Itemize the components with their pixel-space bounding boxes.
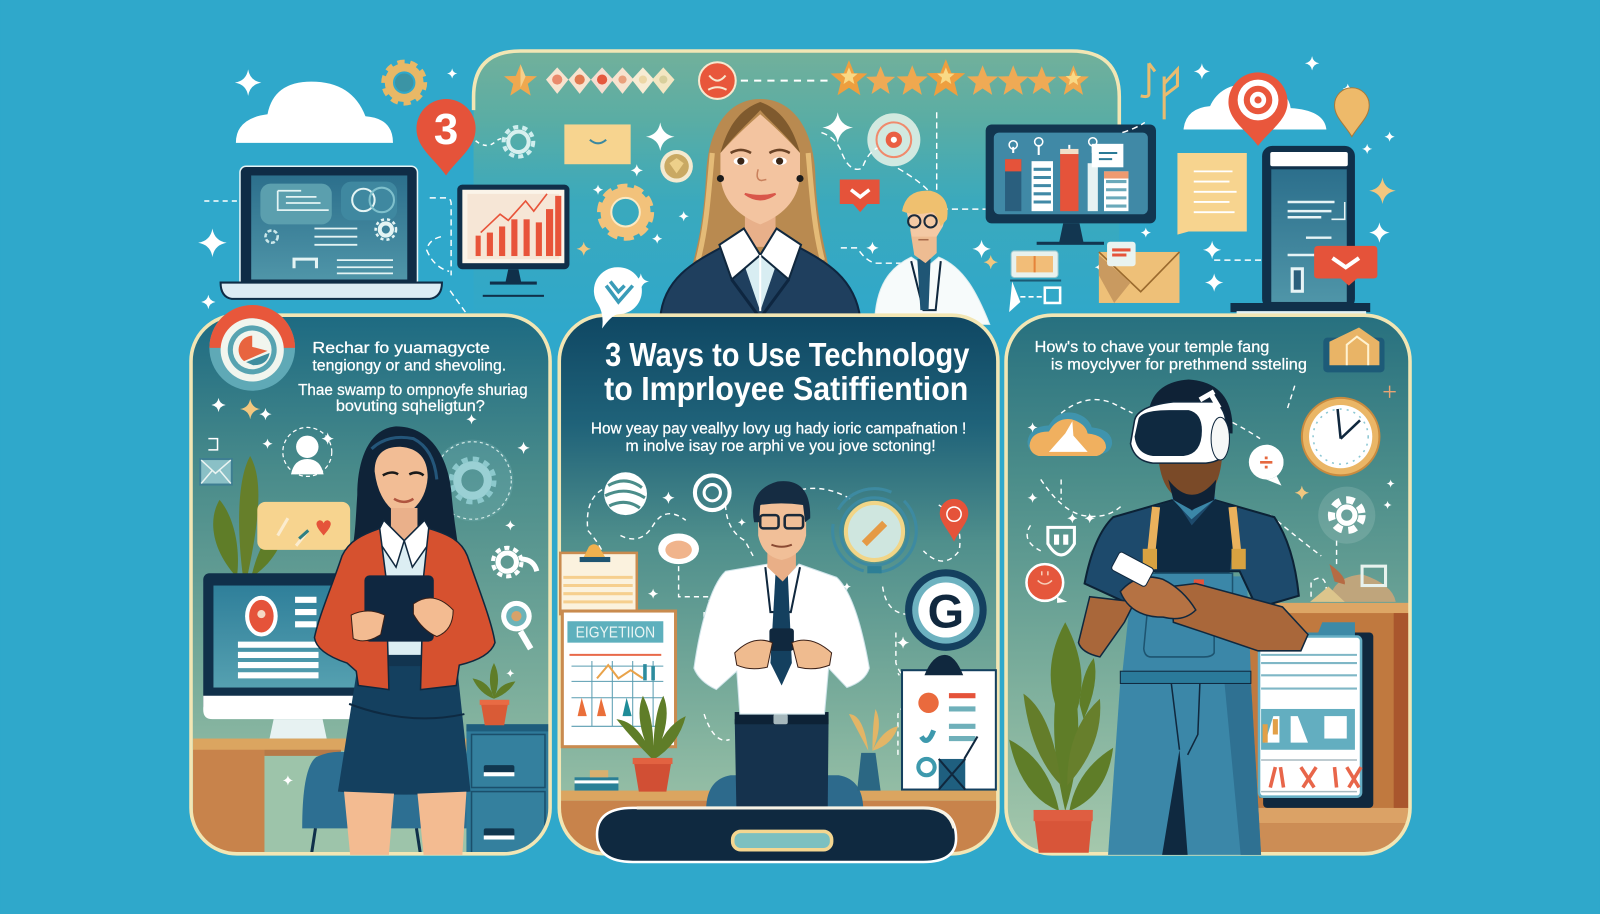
document on screen: [1259, 622, 1373, 808]
icon: gear globe: [432, 440, 513, 521]
icon: target badge: [867, 113, 920, 166]
icon: clock: [1302, 398, 1379, 475]
plant with pot: [1009, 622, 1113, 853]
icon: divide chat: [1249, 445, 1284, 486]
plant with pot: [616, 696, 686, 792]
connector dashes: [1027, 383, 1337, 597]
rating row: badges and stars: [504, 59, 1089, 99]
right panel icons: [1009, 379, 1396, 855]
icon: red map pin with 3: 3: [434, 105, 458, 154]
icon: small teal gear: [476, 127, 533, 157]
icon: gold gear: [384, 62, 425, 103]
right panel cabinet: [1250, 603, 1410, 855]
icon: striped globe: [604, 472, 647, 515]
figure: man with glasses: [874, 191, 990, 324]
icon: shield: [1048, 527, 1074, 555]
connector dashes: [1122, 122, 1261, 260]
chair behind man: [706, 775, 863, 808]
centre panel title: [604, 337, 970, 408]
icon: white gear: [1318, 487, 1375, 544]
left panel text: Thae swamp to ompnoyfe shuriag: [298, 382, 528, 399]
small cross: [1383, 386, 1396, 398]
icon: red and teal target: [209, 305, 295, 391]
poster: chart: EIGYETIION: [576, 625, 655, 642]
icon: cloud badge: [658, 534, 699, 564]
icon: small screen: [1362, 566, 1386, 586]
icon: yellow clipboard: [560, 544, 637, 614]
icon: user avatar: [283, 427, 332, 476]
icon: small arrow and box: [1009, 282, 1060, 312]
icon: monitor with chart: [457, 185, 569, 297]
icon: gold badge: [660, 150, 693, 183]
right panel sparkles: [1027, 422, 1395, 523]
icon: G badge: [905, 569, 987, 651]
left panel text: [298, 340, 528, 415]
icon: G badge: G: [928, 585, 964, 637]
left panel text: bovuting sqheligtun?: [336, 398, 485, 415]
icon: desktop monitor: [203, 573, 367, 739]
centre panel subtitle: [591, 421, 966, 455]
right panel text: How's to chave your temple fang: [1035, 339, 1269, 356]
icon: red pin: [940, 499, 968, 542]
footer pill bar: [597, 808, 956, 862]
icon: smartphone on stand: [1230, 146, 1370, 318]
gold sparkles: [577, 177, 1396, 269]
icon: lens: [833, 489, 916, 573]
icon: small device: [1010, 251, 1061, 282]
icon: ring: [695, 475, 730, 510]
centre panel subtitle: How yeay pay veallyy lovy ug hady ioric campafnation !: [591, 421, 966, 438]
icon: envelope: [200, 439, 232, 485]
right panel text: [1035, 339, 1307, 373]
icon: music notes: [1141, 63, 1177, 119]
poster: chart: [562, 611, 676, 747]
centre panel icons: [560, 472, 996, 828]
icon: basket decoration: [1310, 564, 1396, 602]
connector dashes: [427, 198, 465, 312]
panel: centre: [559, 315, 998, 855]
icon: red map pin with 3: [416, 99, 476, 175]
icon: large gold gear: [600, 187, 651, 238]
panel: right: [1006, 315, 1410, 855]
right panel text: is moyclyver for prethmend ssteling: [1051, 356, 1307, 373]
icon: orange folder badge: [1323, 327, 1385, 372]
icon: red chat bubble on phone: [1314, 246, 1377, 286]
icon: right cloud with target pin: [1184, 72, 1326, 146]
icon: checklist clipboard: [902, 655, 996, 790]
decorative sparkles: [198, 56, 1395, 309]
connector dashes: [821, 112, 986, 263]
gold sparkle: [240, 399, 260, 419]
centre panel desk: [559, 791, 998, 855]
icon: chat bubble with check: [594, 267, 642, 328]
icon: red message badge: [1026, 564, 1067, 603]
panel: left: [191, 315, 550, 855]
icon: yellow note: [1177, 153, 1247, 235]
left panel icons: [200, 426, 537, 855]
icon: yellow message card: [564, 124, 631, 164]
centre panel title: to Imprloyee Satiffiention: [604, 371, 968, 408]
left panel text: tengiongy or and shevoling.: [312, 357, 506, 374]
icon: envelope: [1099, 242, 1179, 303]
panel outlines: [191, 315, 1410, 854]
figure: woman with tablet: [314, 426, 495, 855]
icon: monitor with bar chart: [986, 124, 1156, 245]
panel: top banner: [474, 51, 1119, 326]
icon: red chat bubble: [840, 180, 880, 212]
icon: white gear: [493, 548, 537, 576]
gold sparkle: [1295, 486, 1309, 500]
centre panel sparkles: [648, 492, 909, 649]
figure: woman in centre: [660, 99, 860, 318]
icon: divide chat: ÷: [1259, 449, 1273, 476]
figure: worker with VR headset: [1078, 379, 1308, 855]
small plant with pot: [473, 663, 515, 725]
icon: gold map pin: [1335, 88, 1369, 137]
small yellow plant and vase: [849, 709, 898, 791]
icon: laptop: [204, 166, 442, 299]
icon: magnifying cog: [501, 601, 532, 649]
connector dashes: [587, 488, 960, 755]
books: [575, 770, 618, 791]
centre panel subtitle: m inolve isay roe arphi ve you jove sctoning!: [626, 438, 936, 455]
centre panel title: 3 Ways to Use Technology: [605, 337, 970, 374]
icon: left cloud: [236, 82, 393, 143]
plant behind monitor: [213, 456, 287, 577]
figure: man with phone: [694, 481, 869, 828]
left panel office scene: [191, 724, 550, 855]
left panel sparkles: [211, 398, 530, 785]
icon: orange cloud: [1027, 412, 1112, 456]
icon: yellow comment card: [257, 502, 350, 550]
left panel text: Rechar fo yuamagycte: [312, 340, 490, 357]
footer button: [733, 831, 832, 850]
